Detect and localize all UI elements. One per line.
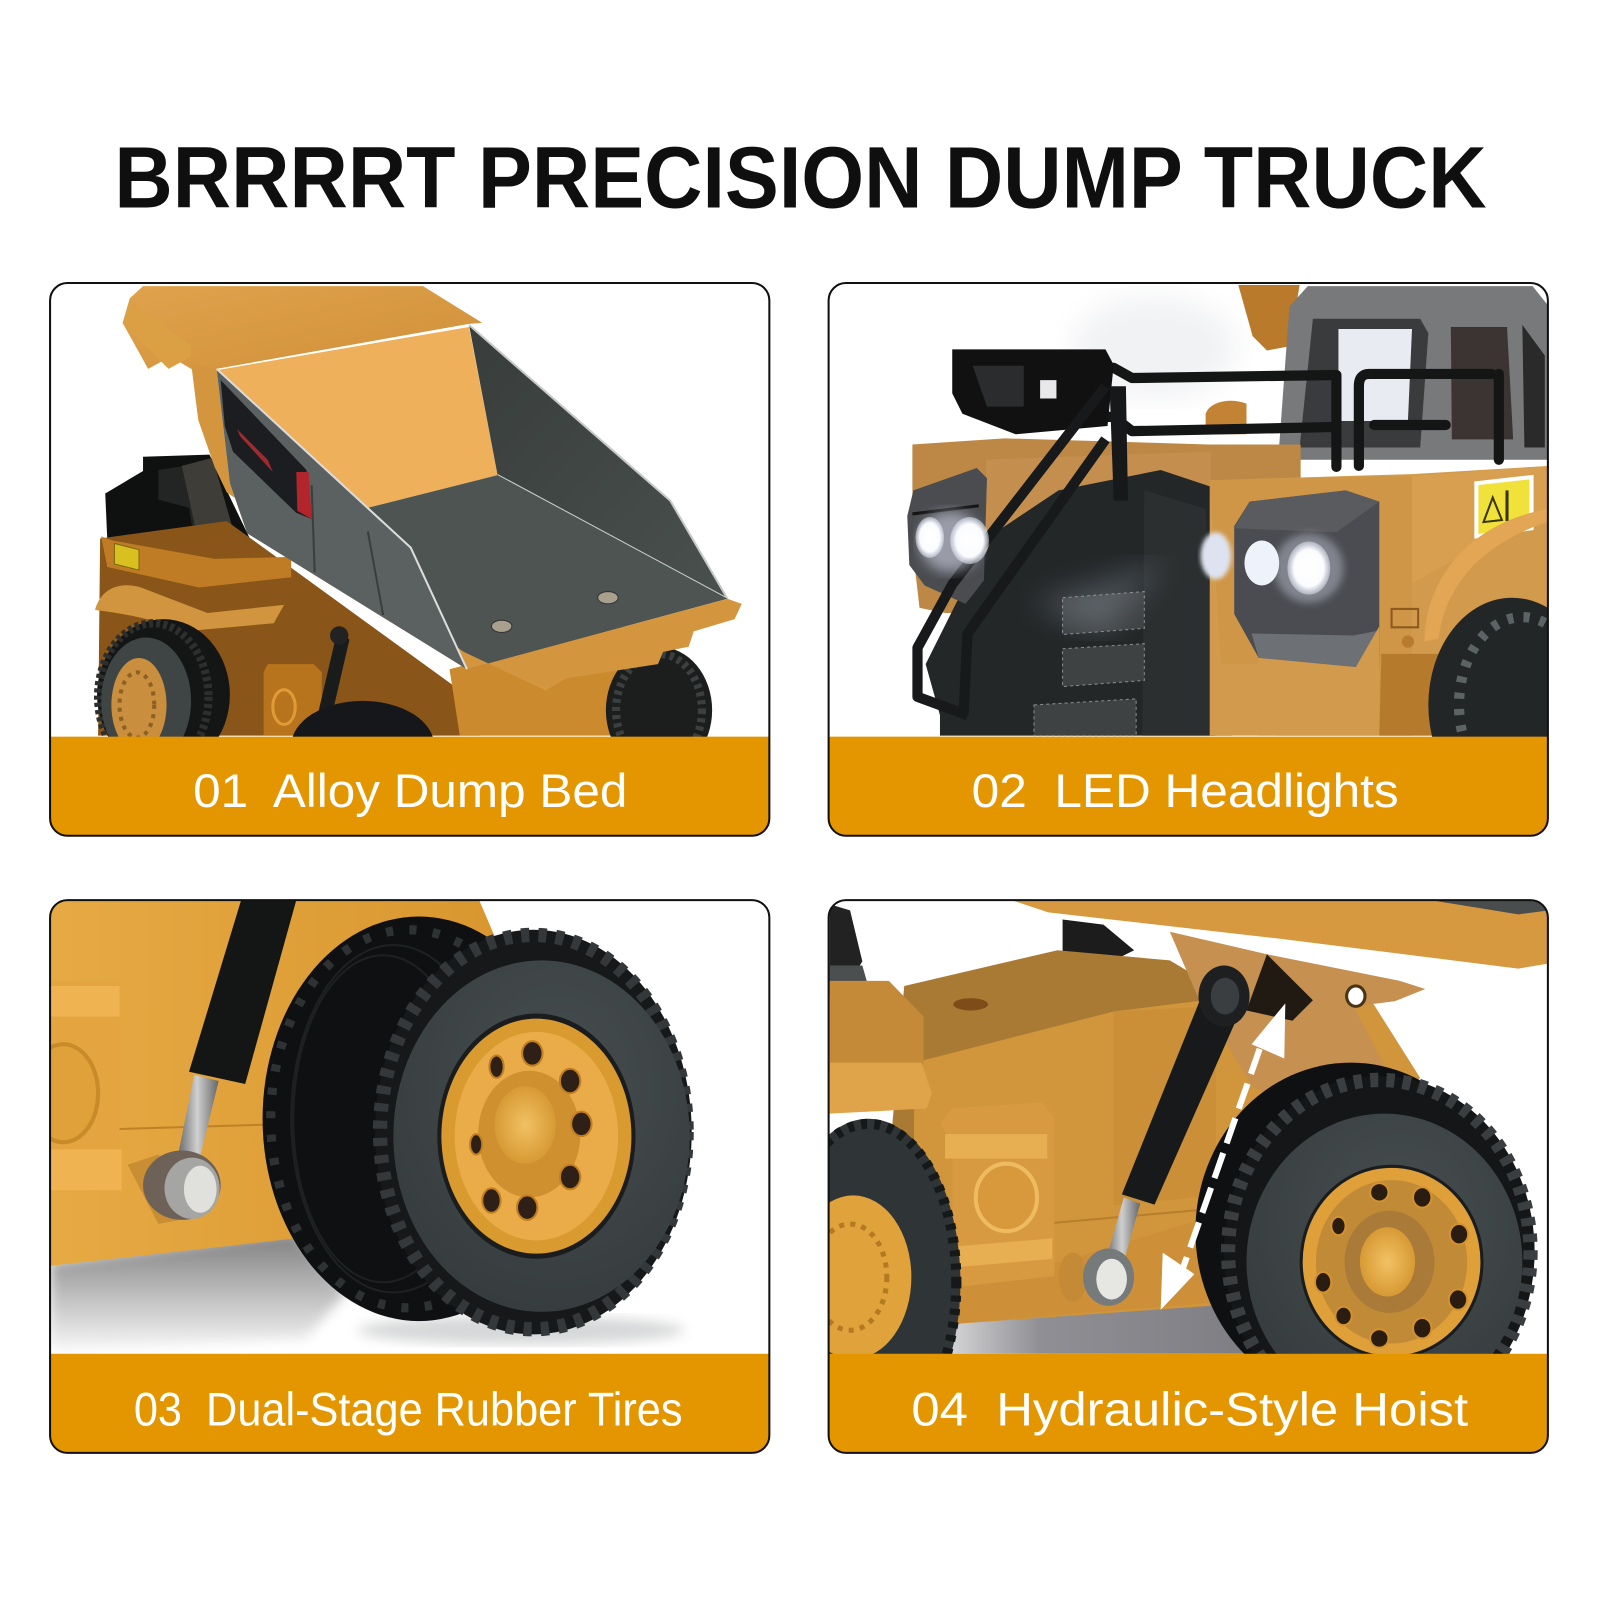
icon: dashed double arrow bbox=[1161, 1003, 1285, 1310]
label 01: 01 Alloy Dump Bed bbox=[193, 764, 627, 817]
photo: hoist strut and rear wheel bbox=[830, 901, 1547, 1354]
panel: 02 led headlights bbox=[829, 283, 1596, 836]
photo: dual rubber tire closeup bbox=[29, 900, 692, 1351]
photo: truck front with glowing headlights bbox=[907, 285, 1547, 737]
panel: 04 hydraulic-style hoist bbox=[777, 900, 1549, 1453]
panel: 03 dual-stage rubber tires bbox=[29, 900, 769, 1453]
title: BRRRRT PRECISION DUMP TRUCK bbox=[114, 129, 1487, 226]
label 03: 03 Dual-Stage Rubber Tires bbox=[134, 1382, 683, 1435]
panel: 01 alloy dump bed bbox=[50, 283, 769, 836]
photo: dump truck with raised bed bbox=[94, 286, 742, 737]
label 02: 02 LED Headlights bbox=[972, 764, 1399, 817]
label 04: 04 Hydraulic-Style Hoist bbox=[911, 1382, 1468, 1435]
